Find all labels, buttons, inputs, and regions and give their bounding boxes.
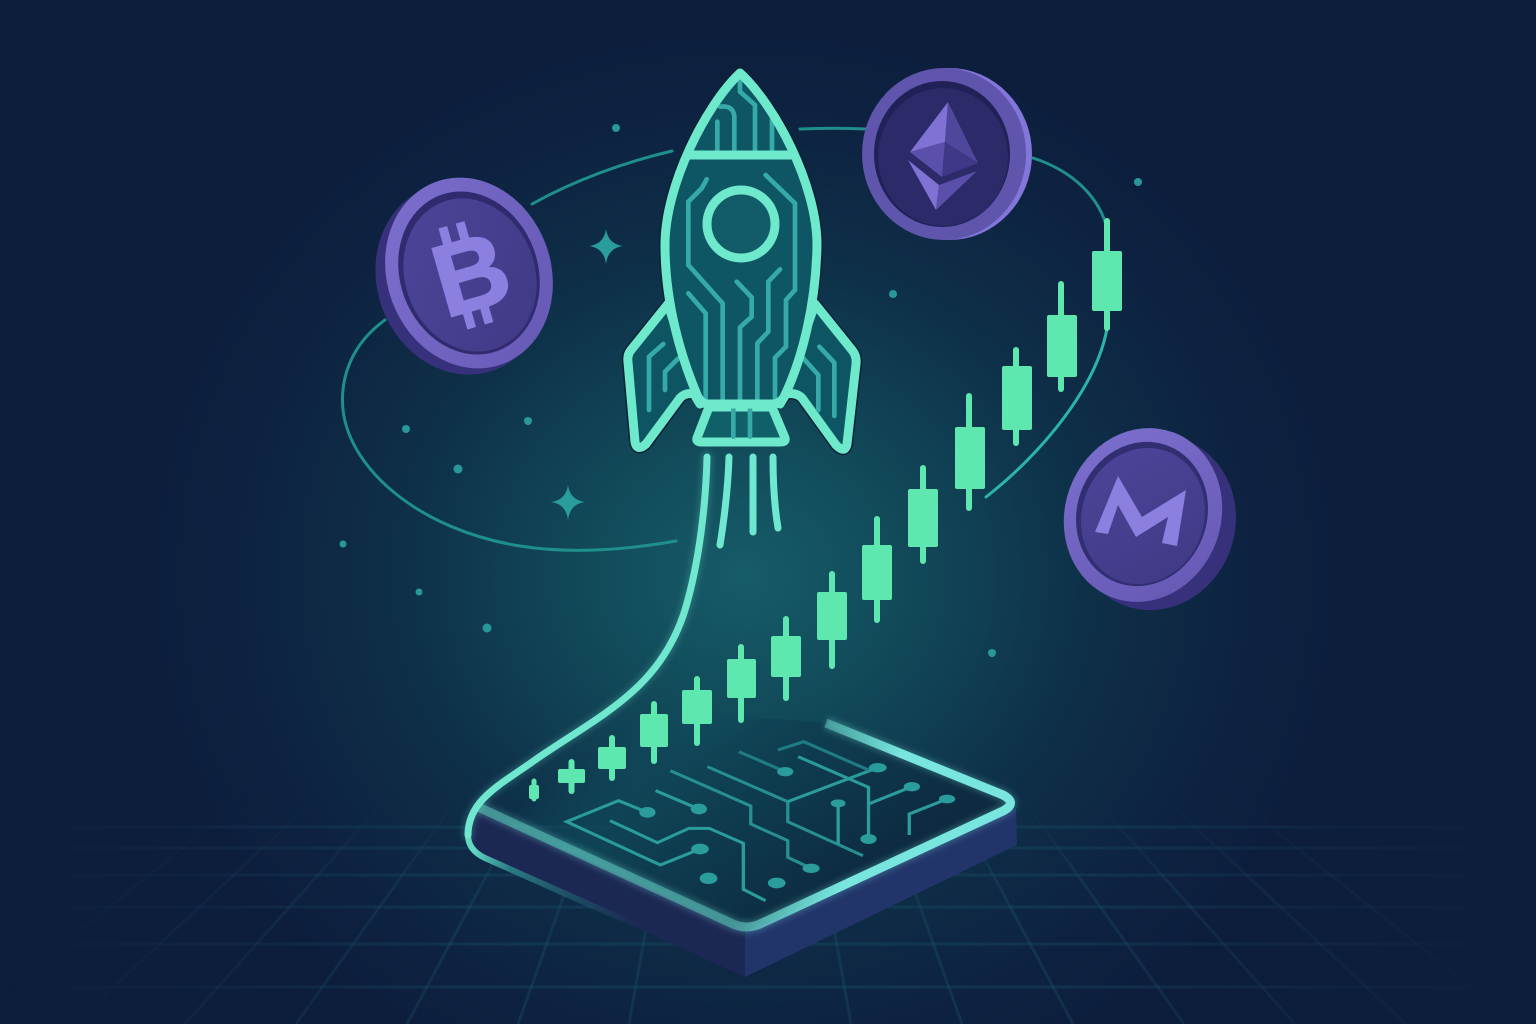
coin: Ethereum (862, 68, 1032, 240)
circuit platform (468, 705, 1017, 977)
platform side faces (470, 808, 1017, 977)
rocket nozzle (697, 407, 785, 442)
background dots (340, 124, 1142, 657)
rocket fins (628, 304, 856, 449)
platform lower glow edge (468, 835, 640, 927)
coin: Bitcoin (349, 154, 579, 399)
rocket dark keyline (628, 73, 856, 449)
platform rim glow (478, 723, 1010, 927)
rocket circuit traces (649, 80, 834, 437)
illustration: crypto rocket launching from circuit platform (146, 68, 1415, 1024)
rocket nose divider (686, 150, 796, 160)
icon: ethereum diamond (908, 102, 978, 210)
rocket exhaust and launch trail (468, 457, 778, 835)
rocket (628, 73, 856, 449)
platform top surface (476, 705, 1012, 928)
icon: monero symbol (1095, 476, 1186, 546)
rocket outline (665, 73, 817, 404)
orbit ring (342, 128, 1108, 550)
rocket body (665, 73, 817, 404)
platform circuit traces (567, 742, 955, 901)
candlestick chart (529, 221, 1122, 799)
sparkle stars (551, 229, 623, 520)
icon: bitcoin symbol: B (420, 209, 522, 339)
coin: Monero (1040, 406, 1260, 633)
platform rim (478, 723, 1010, 927)
perspective floor grid (148, 826, 1374, 1024)
rocket window (707, 190, 775, 258)
